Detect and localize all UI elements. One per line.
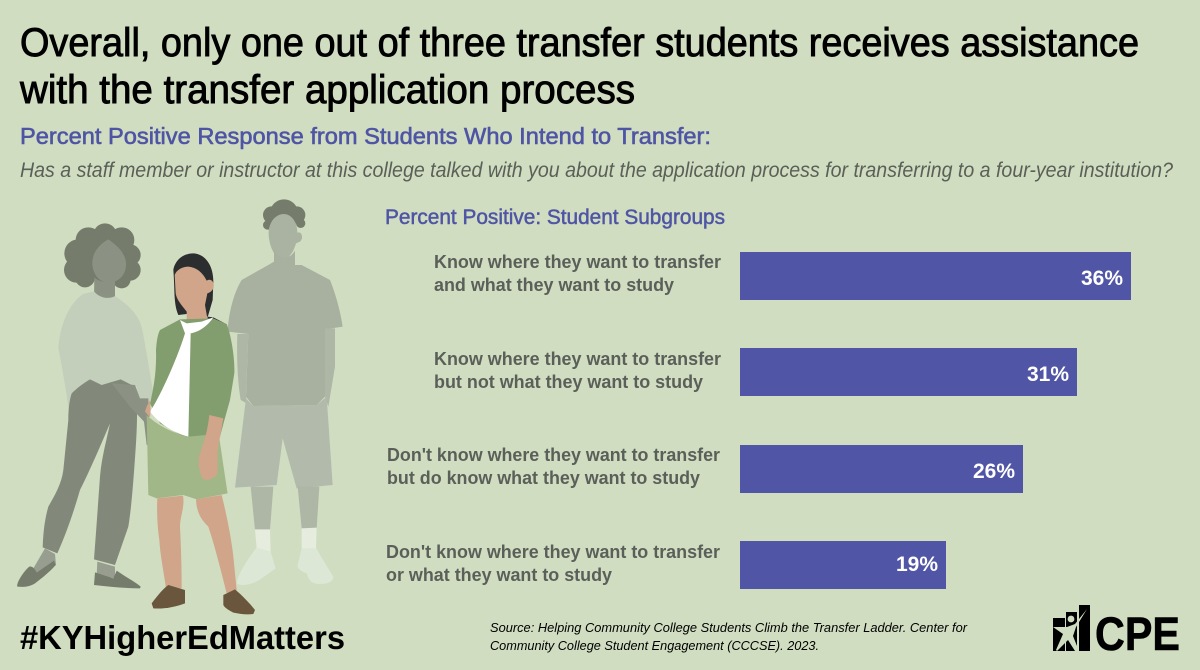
title: Overall, only one out of three transfer students receives assistance [20,21,1139,65]
hashtag: #KYHigherEdMatters [20,619,345,656]
row: don't know where, do know what: 26% [973,460,1015,483]
row: don't know where, do know what: Don't know where they want to transfer [387,445,720,465]
figure: center student [145,253,255,614]
subtitle: Percent Positive Response from Students Who Intend to Transfer: [20,123,711,149]
row: know where, not what: but not what they want to study [434,372,703,392]
row: know where and what: and what they want to study [434,275,674,295]
source note: Source: Helping Community College Students Climb the Transfer Ladder. Center for [490,620,968,635]
row: know where, not what: Know where they want to transfer [434,349,721,369]
row: know where and what: 36% [1081,267,1123,290]
row: know where, not what [434,348,1077,396]
row: know where, not what: 31% [1027,363,1069,386]
row: don't know where, do know what [387,445,1023,493]
logo: CPE [1053,605,1180,660]
row: know where and what: Know where they want to transfer [434,252,721,272]
row: don't know where or what: Don't know where they want to transfer [386,542,720,562]
source note: Community College Student Engagement (CCCSE). 2023. [490,638,819,653]
row: know where and what [434,252,1131,300]
icon: bars and figure [1053,605,1090,651]
row: don't know where or what [386,541,946,589]
figure: right student [228,199,343,585]
figure: left student [17,223,153,588]
title: with the transfer application process [19,68,635,112]
illustration: three students [17,199,343,614]
chart heading: Percent Positive: Student Subgroups [385,206,725,229]
row: don't know where or what: or what they want to study [386,565,612,585]
title [19,21,1139,112]
bar chart [386,252,1131,589]
source note [490,620,968,653]
row: don't know where or what: 19% [896,553,938,576]
logo: CPE: CPE [1095,607,1180,660]
row: don't know where, do know what: but do know what they want to study [387,468,700,488]
